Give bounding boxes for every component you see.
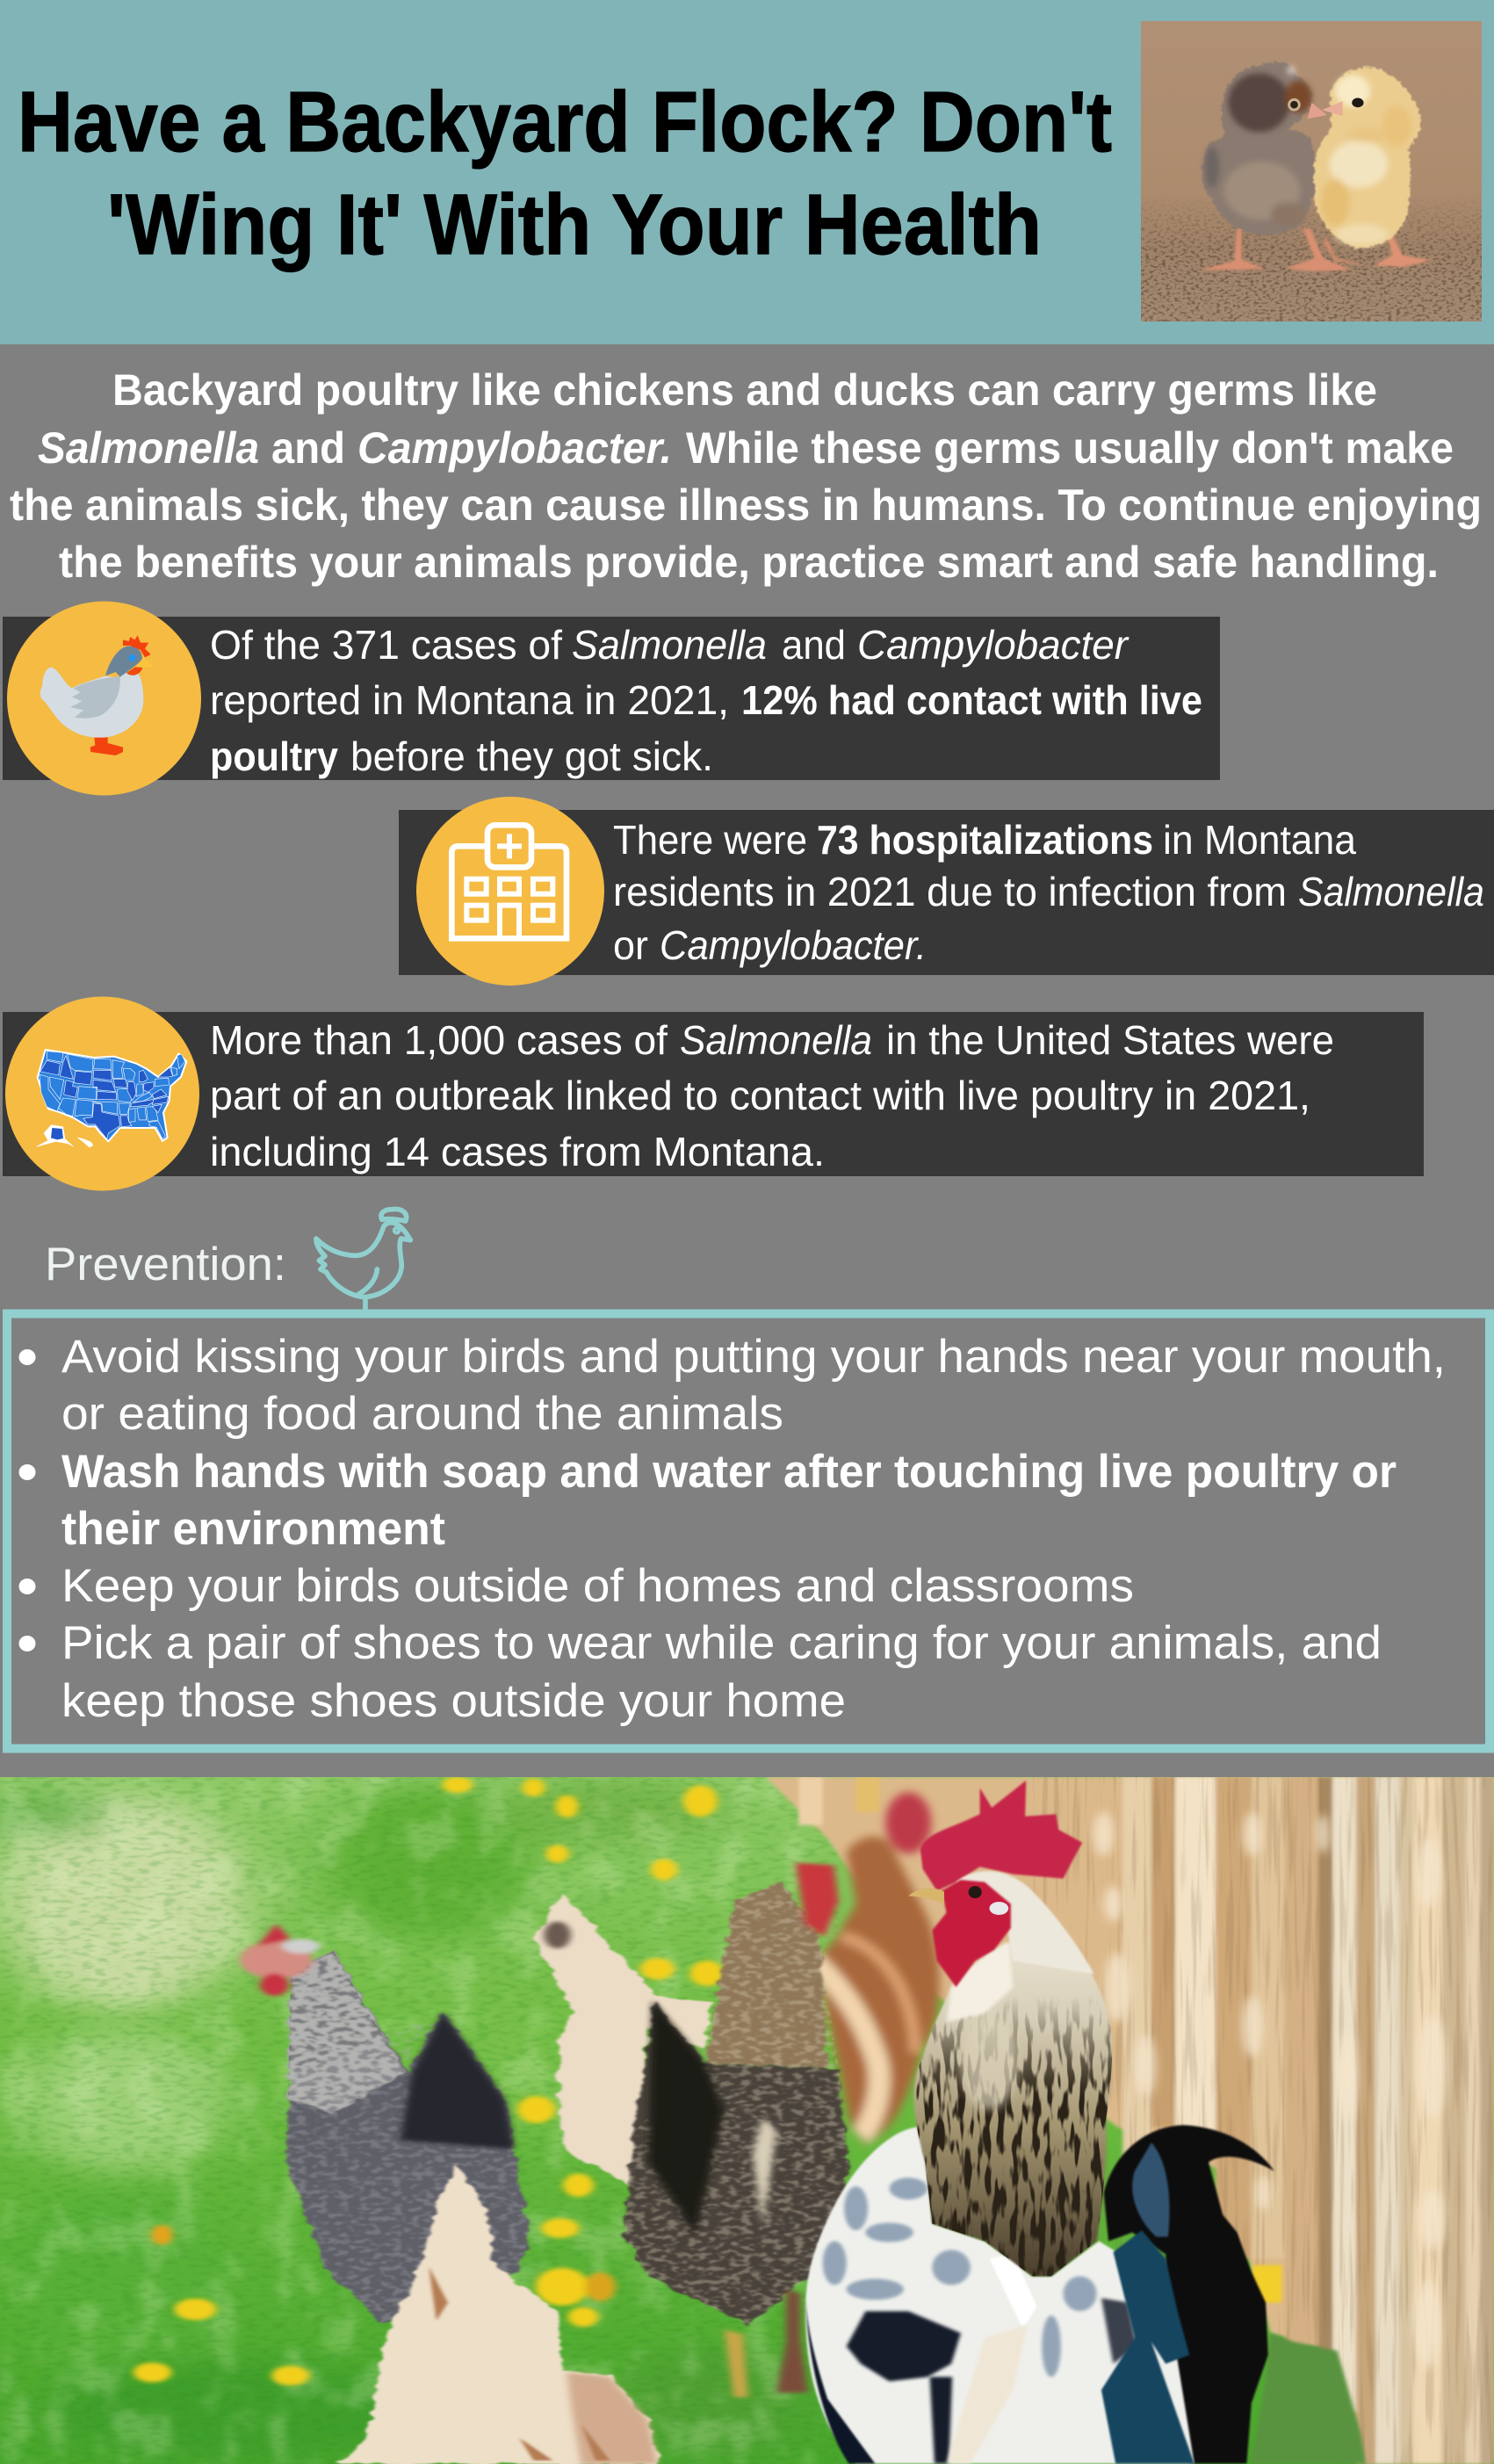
stat text: Salmonella [680,1017,872,1063]
stat text: Salmonella [1298,869,1484,914]
stat text: reported in Montana in 2021, [210,677,729,723]
panel: hospitalizations stat [399,797,1494,986]
title: Have a Backyard Flock? Don't [18,74,1112,170]
stat text: More than 1,000 cases of [210,1017,668,1063]
stat text: part of an outbreak linked to contact with live poultry in 2021, [210,1073,1310,1118]
icon: United States map [37,1050,186,1147]
stat text: Salmonella [572,622,767,668]
stat text: before they got sick. [350,733,713,779]
list text: their environment [61,1503,445,1555]
intro paragraph: and [271,423,345,473]
intro paragraph [10,365,1482,587]
intro paragraph: the animals sick, they can cause illness in humans. To continue enjoying [10,481,1482,530]
intro paragraph: Salmonella [38,423,259,473]
list text: Pick a pair of shoes to wear while caring for your animals, and [61,1617,1382,1669]
stat text: including 14 cases from Montana. [210,1129,825,1174]
list text: or eating food around the animals [61,1388,783,1440]
list text: Avoid kissing your birds and putting your hands near your mouth, [61,1331,1446,1383]
panel: poultry contact stat [3,601,1220,796]
header band [0,0,1494,344]
list text: keep those shoes outside your home [61,1675,846,1727]
stat text: Campylobacter [857,622,1130,668]
photo: two chicks [1141,21,1482,322]
intro paragraph: Campylobacter. [357,423,672,473]
icon: hen [40,635,154,755]
heading: prevention: Prevention: [45,1239,286,1290]
stat text: 73 hospitalizations [817,817,1153,863]
icon: hospital [451,825,567,938]
stat text: or [613,922,648,968]
gray hen [240,1924,534,2325]
photo: chickens in a yard by a fence [0,1777,1494,2464]
stat text [210,1017,1334,1174]
stat text: and [782,622,846,668]
stat text: residents in 2021 due to infection from [613,869,1287,914]
rooster head and comb [920,1781,1082,1891]
stat text: 12% had contact with live [741,677,1202,723]
panel: prevention list [7,1314,1490,1748]
list text: Wash hands with soap and water after touching live poultry or [61,1446,1397,1498]
stat text [210,622,1202,779]
stat text: There were [613,817,807,863]
fence and brown hen [766,1777,1493,2464]
intro paragraph: While these germs usually don't make [686,423,1454,473]
white hen behind [534,1892,710,2190]
chick eyes [1288,98,1364,112]
list text: Keep your birds outside of homes and classrooms [61,1560,1134,1612]
stat text [613,817,1484,968]
panel: national outbreak stat [3,996,1424,1191]
rooster tail [1104,2125,1274,2464]
title: 'Wing It' With Your Health [107,177,1042,272]
chick beaks [1307,103,1327,119]
rooster [805,1781,1274,2464]
stat text: poultry [210,733,338,779]
stat text: Campylobacter. [660,922,927,968]
dandelions [134,1777,724,2386]
stat text: in Montana [1163,817,1356,863]
rooster body [805,2127,1194,2464]
list text [61,1331,1446,1727]
intro paragraph: Backyard poultry like chickens and ducks can carry germs like [112,365,1377,415]
speckled hen [624,1863,853,2397]
white hen front [338,2163,658,2464]
rooster neck [914,1908,1112,2276]
icon: hen outline [316,1209,410,1311]
stat text: in the United States were [886,1017,1334,1063]
rooster blue feathers [1101,2230,1194,2464]
yellow chick [1314,68,1421,249]
title [18,74,1112,272]
bullets [19,1349,35,1651]
stat text: Of the 371 cases of [210,622,562,668]
intro paragraph: the benefits your animals provide, practice smart and safe handling. [59,538,1439,587]
dark chick [1202,62,1315,235]
